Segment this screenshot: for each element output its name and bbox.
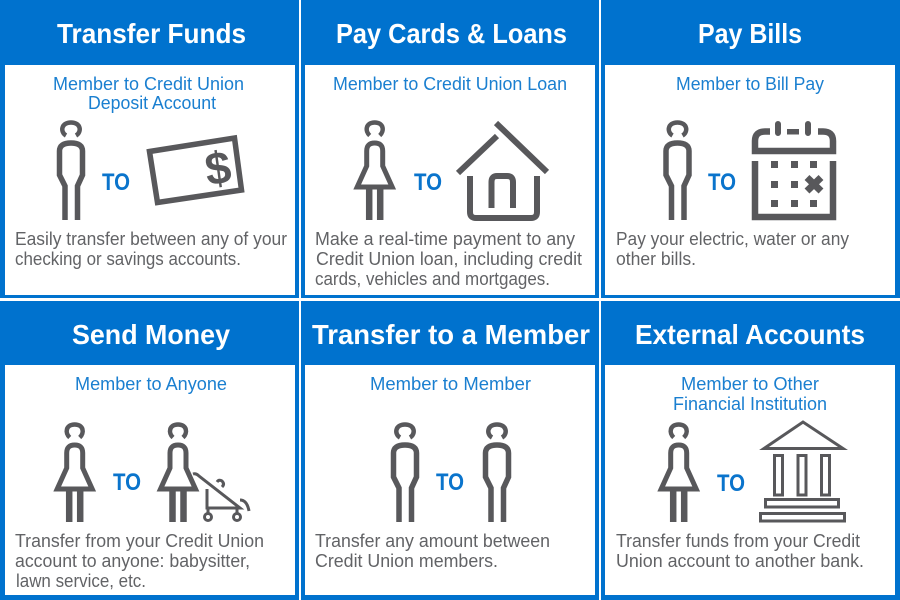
heading: Transfer Funds: Transfer Funds: [57, 18, 246, 49]
icon: man: [394, 424, 416, 522]
panel: Transfer Funds: [0, 0, 299, 298]
subtitle: Member to Credit Union Deposit Account: Member to Credit Union: [53, 74, 244, 94]
description: [315, 229, 582, 289]
description: Make a real-time payment to any: [315, 229, 575, 249]
subtitle: Member to Other Financial Institution: Financial Institution: [673, 394, 827, 414]
subtitle: Member to Other Financial Institution: [673, 374, 827, 414]
description: Credit Union members.: [315, 551, 498, 571]
icon: woman: [57, 424, 92, 522]
description: Transfer from your Credit Union: [15, 531, 264, 551]
description: Credit Union loan, including credit: [316, 249, 582, 269]
heading: Pay Bills: Pay Bills: [698, 18, 802, 49]
description: lawn service, etc.: [16, 571, 146, 591]
label: TO: TO: [113, 469, 141, 496]
subtitle: Member to Credit Union Deposit Account: Deposit Account: [88, 93, 216, 113]
subtitle: Member to Member: Member to Member: [370, 374, 531, 394]
subtitle: Member to Bill Pay: Member to Bill Pay: [676, 74, 824, 94]
description: account to anyone: babysitter,: [15, 551, 250, 571]
icon: man: [486, 424, 508, 522]
icon: man: [666, 122, 689, 220]
icon: dollar bill: [150, 138, 242, 202]
description: Transfer any amount between: [315, 531, 550, 551]
panel: External Accounts: [601, 301, 900, 600]
panel: Send Money: [0, 301, 299, 600]
description: other bills.: [616, 249, 696, 269]
description: Pay your electric, water or any: [616, 229, 849, 249]
description: Union account to another bank.: [616, 551, 864, 571]
label: TO: TO: [414, 169, 442, 196]
icon: calendar: [755, 124, 833, 217]
description: [15, 531, 264, 591]
label: TO: TO: [717, 470, 745, 497]
icon: woman with stroller: [160, 424, 249, 522]
description: [15, 229, 287, 269]
description: cards, vehicles and mortgages.: [315, 269, 550, 289]
panel: Transfer to a Member: [301, 301, 599, 600]
description: [616, 531, 864, 571]
description: [616, 229, 849, 269]
icon: dollar bill: $: [202, 140, 234, 196]
subtitle: Member to Other Financial Institution: Member to Other: [681, 374, 819, 394]
description: Transfer funds from your Credit: [616, 531, 860, 551]
icon: bank: [760, 422, 844, 521]
subtitle: Member to Anyone: Member to Anyone: [75, 374, 227, 394]
description: [315, 531, 550, 571]
icon: house: [458, 123, 547, 218]
icon: woman: [661, 424, 696, 522]
description: checking or savings accounts.: [15, 249, 241, 269]
icon: man: [60, 122, 82, 220]
subtitle: Member to Credit Union Loan: Member to Credit Union Loan: [333, 74, 567, 94]
subtitle: Member to Credit Union Deposit Account: [53, 74, 244, 113]
heading: Send Money: Send Money: [72, 319, 230, 350]
label: TO: TO: [102, 169, 130, 196]
panel: Pay Cards & Loans: [301, 0, 599, 298]
label: TO: TO: [708, 169, 736, 196]
heading: External Accounts: External Accounts: [635, 319, 865, 350]
panel: Pay Bills: [601, 0, 900, 298]
description: Easily transfer between any of your: [15, 229, 287, 249]
heading: Pay Cards & Loans: Pay Cards & Loans: [336, 18, 567, 49]
label: TO: TO: [436, 469, 464, 496]
heading: Transfer to a Member: Transfer to a Member: [312, 319, 590, 350]
icon: woman: [357, 122, 392, 220]
